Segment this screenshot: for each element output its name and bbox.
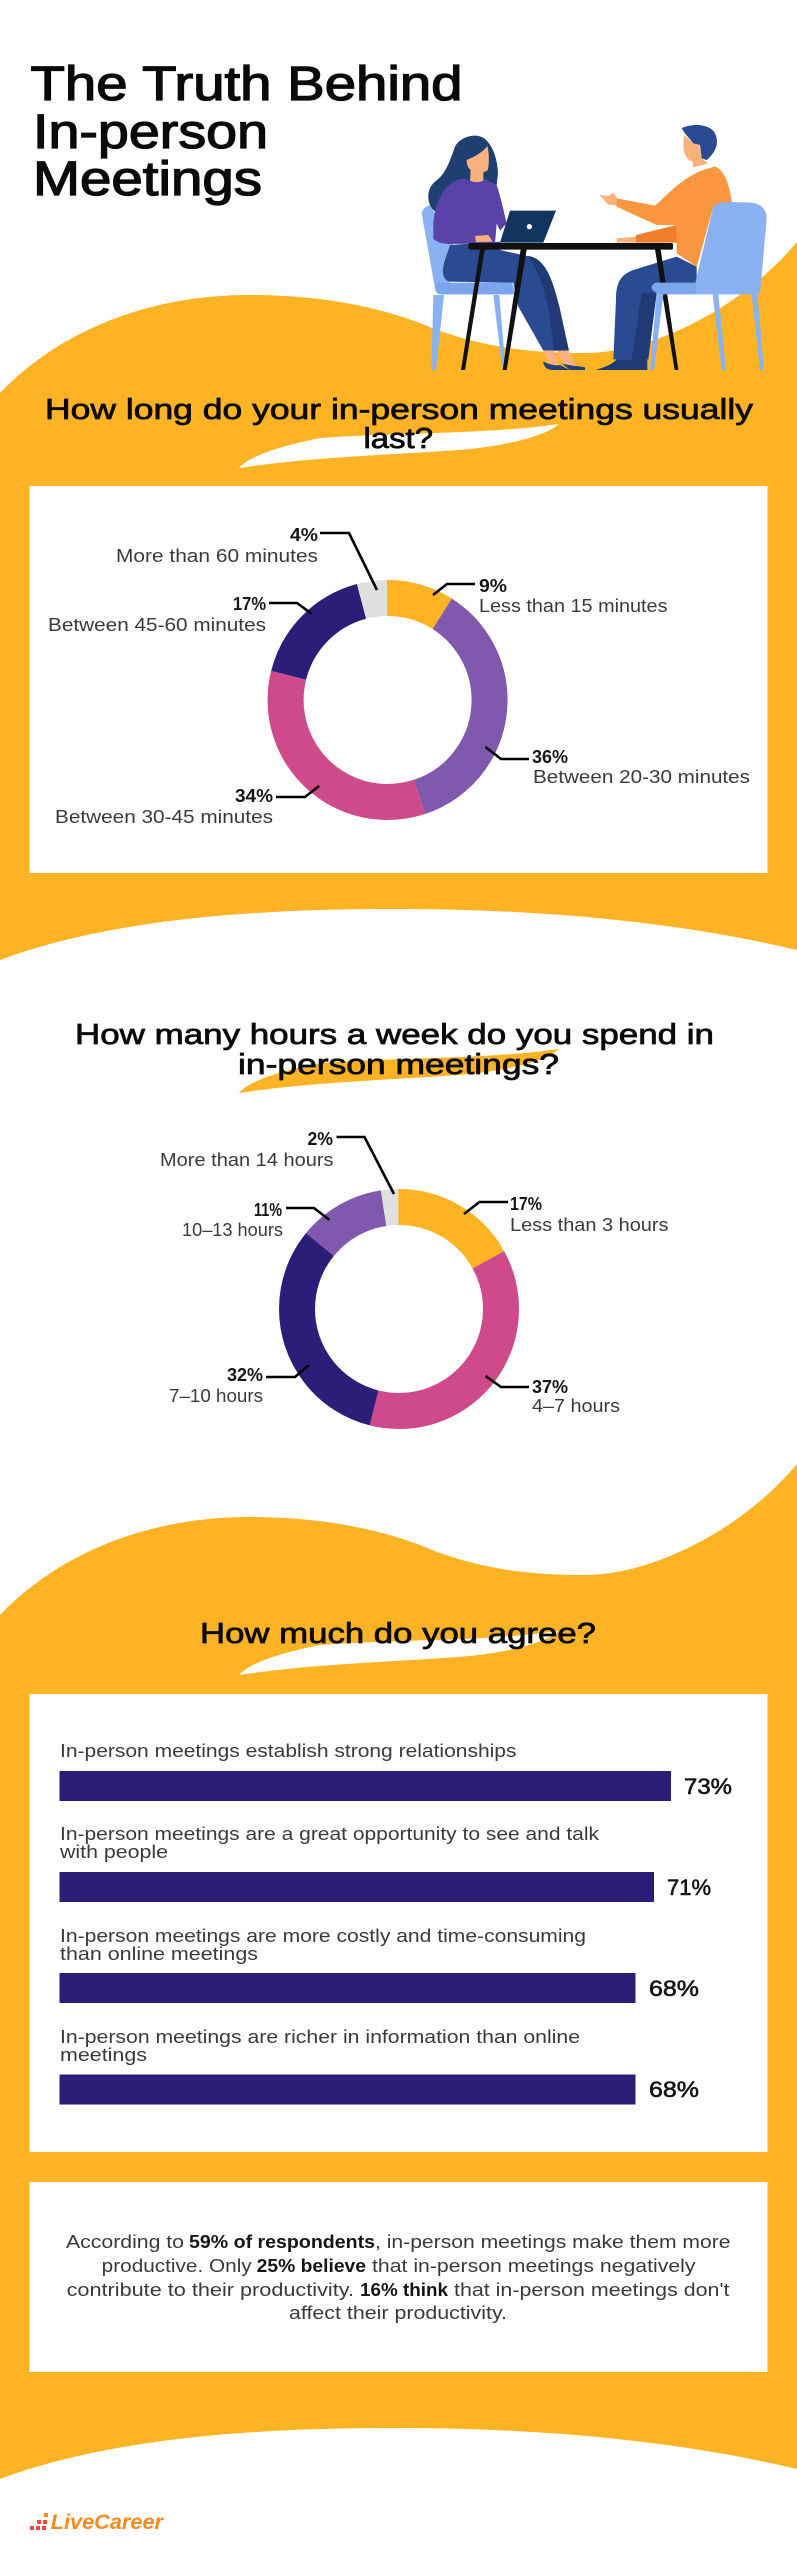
bar row: richer in information [60,2027,699,2104]
panel: weekly hours donut [160,1129,668,1416]
callout: 9% [433,576,668,616]
callout: 4%: More than 60 minutes [116,546,318,566]
summary text: 16% think [360,2280,449,2300]
donut chart: weekly hours [297,1207,501,1411]
brush stroke under heading 1 [239,424,559,468]
heading 2: How many hours a week do you spend in [75,1019,714,1051]
summary text: contribute to their productivity. [67,2280,354,2300]
callout: 4% [116,525,377,590]
callout: 9%: Less than 15 minutes [479,596,668,616]
summary text: , in-person meetings make them more [375,2232,730,2252]
bar row: costly and time-consuming [60,1926,699,2003]
title: Meetings [33,153,262,206]
woman [428,136,585,370]
callout: 17%: 17% [510,1194,542,1214]
callout: 32%: 7–10 hours [169,1386,263,1406]
callout: 34% [55,786,319,827]
donut chart: meeting length [286,598,490,802]
left chair [422,205,514,370]
callout: 17%: Between 45-60 minutes [48,615,266,635]
summary text: that in-person meetings negatively [372,2256,696,2276]
heading 1: How long do your in-person meetings usually [45,394,754,426]
callout: 9%: 9% [479,576,507,596]
table [461,243,678,370]
summary text: 25% believe [257,2256,366,2276]
callout: 36% [486,747,750,787]
callout: 17%: Less than 3 hours [510,1215,668,1235]
callout: 11% [182,1200,330,1240]
heading 1 [45,394,754,455]
callout: 36%: Between 20-30 minutes [533,767,750,787]
heading 1: last? [364,423,433,455]
bar row: richer in information: 68% [649,2077,699,2102]
bar row: see and talk with people: In-person meetings are a great opportunity to see and talk [60,1824,600,1844]
summary text: that in-person meetings don't [454,2280,730,2300]
illustration: two people meeting at a table [422,125,767,370]
summary text [66,2232,730,2323]
callout: 2% [160,1129,394,1194]
yellow wave background: top section [0,242,797,960]
bar row: strong relationships [60,1741,732,1801]
panel: agreement bar chart [30,1694,768,2152]
callout: 17%: 17% [233,594,266,614]
callout: 2%: More than 14 hours [160,1150,334,1170]
callout: 4%: 4% [290,525,318,545]
callout: 34%: 34% [235,786,273,806]
summary text: According to [66,2232,184,2252]
yellow wave background: bottom section [0,1464,797,2479]
heading 2 [75,1019,714,1081]
panel: productivity summary [30,2182,768,2372]
callout: 37%: 4–7 hours [532,1396,620,1416]
bar row: costly and time-consuming: 68% [649,1976,699,2001]
logo: LiveCareer: LiveCareer [51,2511,165,2534]
bar row: strong relationships: 73% [684,1774,732,1799]
laptop [500,211,556,243]
title: The Truth Behind [30,58,463,111]
summary text: productive. Only [102,2256,252,2276]
summary text: 59% of respondents [189,2232,375,2252]
title: In-person [33,106,268,159]
brush stroke under heading 2 [239,1049,559,1093]
callout: 32%: 32% [227,1365,263,1385]
man [596,125,732,370]
callout: 32% [169,1365,309,1406]
heading 2: in-person meetings? [238,1049,559,1081]
bar row: costly and time-consuming: In-person meetings are more costly and time-consuming [60,1926,586,1946]
callout: 36%: 36% [532,747,568,767]
summary text: affect their productivity. [289,2303,507,2323]
callout: 37% [486,1376,620,1416]
bar row: strong relationships: In-person meetings establish strong relationships [60,1741,516,1761]
bar row: richer in information: In-person meetings are richer in information than online [60,2027,580,2047]
bar row: see and talk with people: with people [59,1842,168,1862]
callout: 2%: 2% [308,1129,333,1149]
title [30,58,463,206]
heading 3: How much do you agree? [200,1618,596,1650]
icon: logo bars [30,2513,48,2530]
bar row: see and talk with people [59,1824,711,1902]
bar row: costly and time-consuming: than online meetings [60,1944,258,1964]
callout: 11%: 10–13 hours [182,1220,283,1240]
right chair [650,202,767,370]
callout: 17% [464,1194,668,1235]
callout: 17% [48,594,312,635]
bar row: see and talk with people: 71% [667,1875,711,1900]
panel: meeting length donut [30,486,768,873]
callout: 11%: 11% [254,1200,282,1220]
brush stroke under heading 3 [239,1631,559,1675]
callout: 37%: 37% [532,1377,568,1397]
bar row: richer in information: meetings [60,2045,147,2065]
callout: 34%: Between 30-45 minutes [55,807,273,827]
